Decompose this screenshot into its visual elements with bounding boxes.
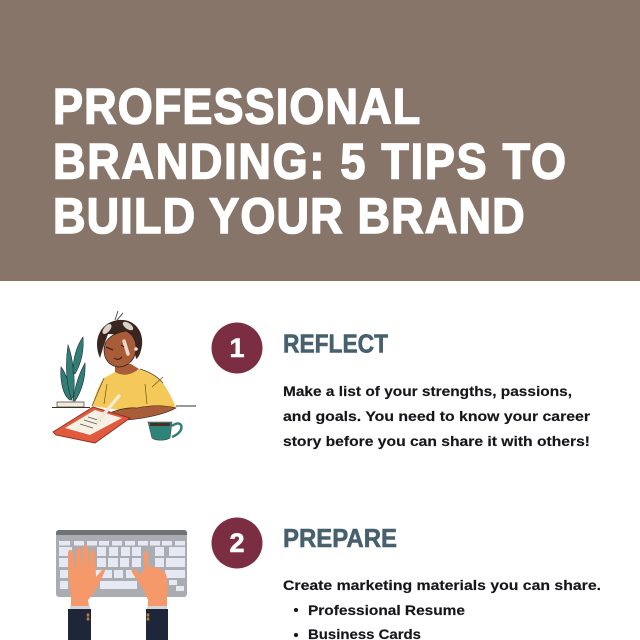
- step 1 body text: story before you can share it with others!: [283, 434, 590, 449]
- shirt: [92, 369, 176, 410]
- title: [53, 79, 566, 245]
- mug: [148, 422, 181, 440]
- shirt cuffs: [70, 606, 167, 609]
- hair: [97, 320, 142, 359]
- step 1 heading: REFLECT: [283, 328, 388, 358]
- step 1 body text: and goals. You need to know your career: [283, 409, 591, 424]
- step 2 body text: [283, 578, 601, 640]
- step 1 number badge: [212, 322, 262, 374]
- keyboard body: [56, 530, 187, 597]
- step 1 body text: Make a list of your strengths, passions,: [283, 384, 572, 399]
- step 2 body text: Create marketing materials you can share.: [283, 578, 601, 593]
- step 1 number badge: 1: [229, 333, 245, 363]
- right sleeve: [146, 609, 168, 640]
- desk line: [52, 406, 196, 408]
- step 2 number badge: 2: [229, 528, 245, 558]
- neck: [115, 364, 139, 375]
- step 2 heading: PREPARE: [283, 523, 397, 553]
- step 1 body text: [283, 384, 591, 449]
- notebook: [53, 407, 130, 443]
- title: PROFESSIONAL: [53, 79, 420, 135]
- right hand: [132, 551, 168, 606]
- bullet list: [294, 603, 466, 640]
- hair clips: [101, 322, 113, 336]
- arm: [100, 406, 176, 423]
- sleeve buttons: [88, 614, 148, 620]
- left sleeve: [68, 609, 91, 640]
- step 2 number badge: [212, 518, 262, 568]
- left hand: [68, 545, 105, 606]
- pen: [98, 396, 119, 421]
- header banner: [0, 0, 640, 281]
- icon: person writing at desk: [52, 311, 196, 443]
- title: BUILD YOUR BRAND: [53, 189, 525, 245]
- icon: hands on keyboard: [56, 530, 187, 640]
- bullet list: Professional Resume: [308, 603, 466, 618]
- plant: [57, 337, 85, 407]
- keys: [59, 541, 185, 591]
- face: [104, 331, 136, 367]
- title: BRANDING: 5 TIPS TO: [53, 134, 566, 190]
